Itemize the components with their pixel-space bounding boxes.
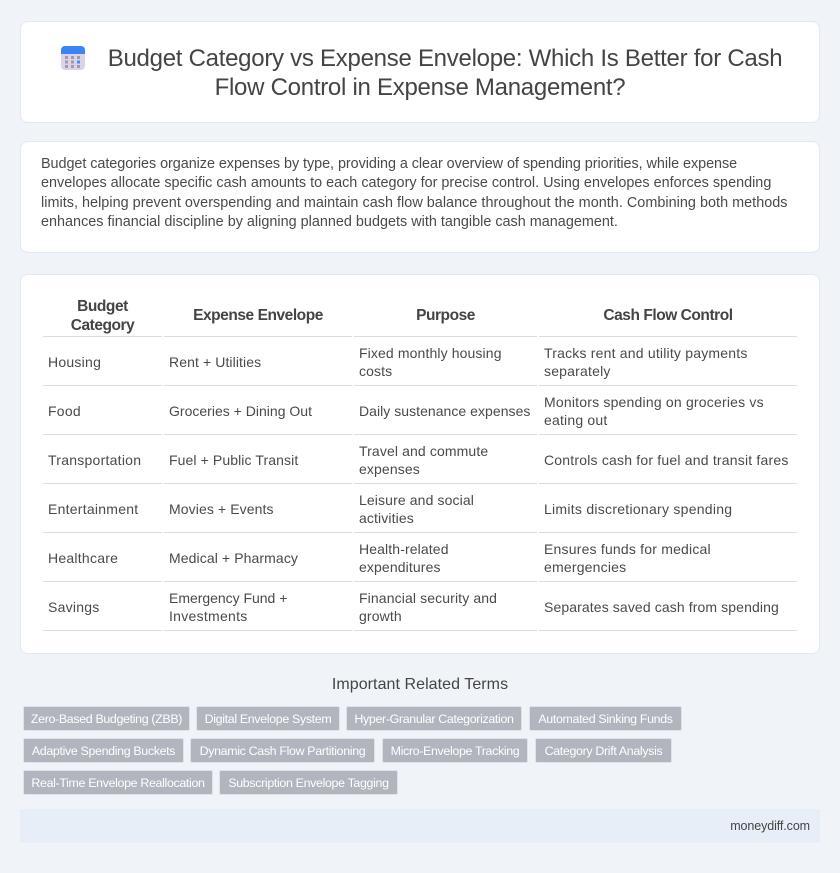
table panel: [20, 274, 820, 654]
header panel: [20, 21, 820, 123]
row: housing: costs: [359, 363, 392, 379]
row: savings: growth: [359, 608, 402, 624]
row: savings: Separates saved cash from spending: [544, 599, 779, 615]
title: Budget Category vs Expense Envelope: Which Is Better for Cash: [108, 45, 782, 72]
row: food: Monitors spending on groceries vs: [544, 394, 764, 410]
table header: Cash Flow Control: [603, 307, 733, 324]
footer bar: [20, 809, 820, 843]
related terms tags: Hyper-Granular Categorization: [354, 712, 514, 726]
row: savings: Savings: [48, 599, 100, 615]
row: savings: [48, 590, 779, 624]
row: entertainment: [48, 492, 732, 526]
footer source: moneydiff.com: [730, 819, 810, 833]
table header: Expense Envelope: [193, 307, 323, 324]
intro text: [41, 156, 788, 230]
row: healthcare: [48, 541, 711, 575]
related terms tags: Subscription Envelope Tagging: [228, 776, 389, 790]
title: [108, 45, 782, 101]
row: entertainment: Limits discretionary spending: [544, 501, 732, 517]
row: entertainment: Entertainment: [48, 501, 138, 517]
row: savings: Financial security and: [359, 590, 497, 606]
row: housing: Housing: [48, 354, 101, 370]
related terms tags: Category Drift Analysis: [545, 744, 662, 758]
row: savings: Emergency Fund +: [169, 590, 287, 606]
related terms tags: Automated Sinking Funds: [538, 712, 673, 726]
row: transportation: expenses: [359, 461, 420, 477]
icon: calendar: [61, 46, 85, 70]
related terms tags: Real-Time Envelope Reallocation: [31, 776, 205, 790]
row: savings: Investments: [169, 608, 248, 624]
row: healthcare: expenditures: [359, 559, 441, 575]
row: housing: [48, 345, 748, 379]
table header: Purpose: [416, 307, 475, 324]
row: entertainment: activities: [359, 510, 414, 526]
table header: Budget: [77, 298, 128, 315]
row: healthcare: emergencies: [544, 559, 626, 575]
table header: Category: [71, 317, 134, 334]
row: housing: separately: [544, 363, 611, 379]
row: transportation: Travel and commute: [359, 443, 488, 459]
row: transportation: Controls cash for fuel and transit fares: [544, 452, 789, 468]
row: entertainment: Leisure and social: [359, 492, 474, 508]
row: housing: Fixed monthly housing: [359, 345, 502, 361]
row: transportation: [48, 443, 789, 477]
row: healthcare: Healthcare: [48, 550, 118, 566]
row: healthcare: Medical + Pharmacy: [169, 550, 298, 566]
intro text: enhances financial discipline by aligning planned budgets with tangible cash management.: [41, 214, 618, 230]
intro text: limits, helping prevent overspending and maintain cash flow balance throughout the month. Combining both methods: [41, 194, 788, 210]
related terms heading: Important Related Terms: [332, 676, 508, 693]
comparison table: [43, 298, 797, 631]
row: food: Food: [48, 403, 81, 419]
related terms tags: Zero-Based Budgeting (ZBB): [31, 712, 182, 726]
row: housing: Tracks rent and utility payments: [544, 345, 748, 361]
title: Flow Control in Expense Management?: [215, 74, 625, 101]
row: housing: Rent + Utilities: [169, 354, 261, 370]
row: transportation: Transportation: [48, 452, 141, 468]
intro panel: [20, 141, 820, 253]
row: food: Groceries + Dining Out: [169, 403, 312, 419]
intro text: Budget categories organize expenses by type, providing a clear overview of spending priorities, while expense: [41, 156, 737, 172]
row: healthcare: Health-related: [359, 541, 449, 557]
related terms tags: Digital Envelope System: [205, 712, 331, 726]
related terms tags: Micro-Envelope Tracking: [391, 744, 519, 758]
related terms tags: Dynamic Cash Flow Partitioning: [200, 744, 365, 758]
row: entertainment: Movies + Events: [169, 501, 274, 517]
related terms tags: [23, 706, 682, 795]
row: food: eating out: [544, 412, 608, 428]
row: healthcare: Ensures funds for medical: [544, 541, 711, 557]
related terms tags: Adaptive Spending Buckets: [32, 744, 175, 758]
table header: [71, 298, 733, 334]
intro text: envelopes allocate specific cash amounts to each category for precise control. Using envelopes enforces spending: [41, 175, 771, 191]
row: food: [48, 394, 764, 428]
row: transportation: Fuel + Public Transit: [169, 452, 298, 468]
row: food: Daily sustenance expenses: [359, 403, 530, 419]
